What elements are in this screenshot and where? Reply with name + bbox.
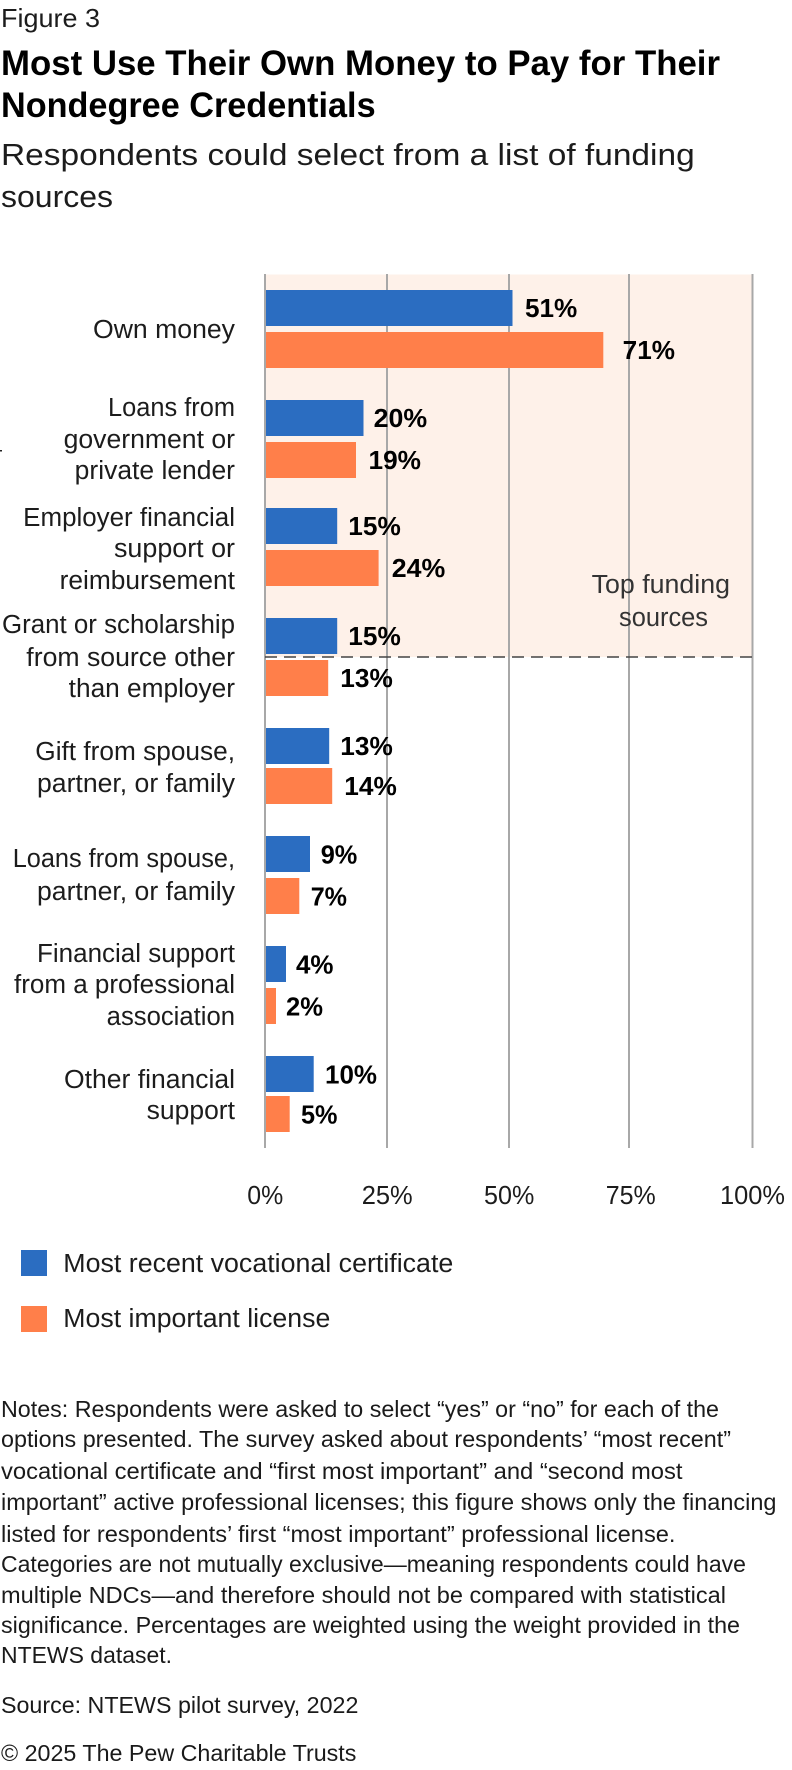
group: grant or scholarship: 13% — [340, 663, 393, 693]
group: gift from spouse, partner, or family — [35, 728, 397, 804]
title: Nondegree Credentials — [1, 86, 376, 125]
group: grant or scholarship — [2, 611, 401, 703]
x axis labels: 0% — [247, 1182, 283, 1210]
notes: NTEWS dataset. — [1, 1642, 172, 1668]
notes: significance. Percentages are weighted using the weight provided in the — [1, 1612, 740, 1638]
tiny edge mark — [0, 450, 2, 452]
group: grant or scholarship: 15% — [348, 621, 401, 651]
group: gift from spouse, partner, or family: Gift from spouse, — [35, 738, 235, 766]
group: loans from spouse, partner, or family — [13, 836, 357, 914]
group: other financial support: support — [147, 1097, 235, 1125]
notes: Notes: Respondents were asked to select “yes” or “no” for each of the — [1, 1396, 719, 1422]
subtitle: Respondents could select from a list of funding — [1, 137, 695, 172]
group: other financial support: Other financial — [64, 1066, 235, 1094]
group: employer financial support: support or — [114, 535, 236, 563]
group: loans from spouse, partner, or family: partner, or family — [37, 878, 235, 906]
subtitle: sources — [1, 179, 113, 214]
notes: important” active professional licenses; this figure shows only the financing — [1, 1489, 776, 1515]
panel: top funding sources highlight — [265, 274, 752, 657]
group: gift from spouse, partner, or family: 13% — [340, 731, 393, 761]
group: financial support from a professional association: from a professional — [14, 971, 235, 999]
group: grant or scholarship: from source other — [26, 644, 236, 672]
notes: vocational certificate and “first most important” and “second most — [1, 1458, 683, 1484]
group: own money: 71% — [623, 335, 675, 365]
group: gift from spouse, partner, or family: partner, or family — [37, 770, 235, 798]
copyright: © 2025 The Pew Charitable Trusts — [1, 1740, 356, 1766]
figure number: Figure 3 — [1, 3, 100, 33]
x axis labels — [247, 1182, 785, 1210]
group: loans from government or private lender: 20% — [374, 403, 427, 433]
group: gift from spouse, partner, or family: 14% — [344, 771, 397, 801]
group: financial support from a professional association — [14, 940, 334, 1031]
group: grant or scholarship: Grant or scholarship — [2, 611, 235, 639]
x axis labels: 50% — [484, 1182, 534, 1210]
title: Most Use Their Own Money to Pay for Their — [1, 44, 720, 83]
annotation: top funding sources — [592, 571, 730, 632]
group: own money: 51% — [525, 293, 577, 323]
notes — [1, 1396, 776, 1668]
x axis labels: 75% — [606, 1182, 656, 1210]
group: employer financial support: reimbursement — [60, 567, 235, 595]
group: financial support from a professional association: association — [107, 1003, 235, 1031]
annotation: top funding sources: sources — [619, 604, 708, 632]
bar chart — [2, 290, 675, 1132]
group: financial support from a professional association: 2% — [286, 992, 323, 1022]
group: loans from spouse, partner, or family: 9% — [321, 840, 357, 870]
notes: multiple NDCs—and therefore should not be compared with statistical — [1, 1582, 726, 1608]
notes: Categories are not mutually exclusive—meaning respondents could have — [1, 1551, 746, 1577]
notes: listed for respondents’ first “most important” professional license. — [1, 1521, 676, 1547]
group: own money — [93, 290, 675, 368]
subtitle — [1, 137, 695, 214]
group: employer financial support — [23, 504, 445, 595]
chart gridlines — [265, 274, 752, 1148]
group: other financial support: 5% — [301, 1100, 338, 1130]
annotation: top funding sources: Top funding — [592, 571, 730, 599]
group: financial support from a professional association: 4% — [296, 950, 334, 980]
legend — [21, 1250, 453, 1333]
group: employer financial support: Employer financial — [23, 504, 235, 532]
group: loans from government or private lender: private lender — [75, 457, 236, 485]
legend: most recent vocational certificate: Most recent vocational certificate — [63, 1250, 453, 1278]
group: loans from spouse, partner, or family: Loans from spouse, — [13, 845, 235, 873]
group: employer financial support: 15% — [348, 511, 401, 541]
group: loans from spouse, partner, or family: 7% — [311, 882, 347, 912]
group: own money: Own money — [93, 316, 235, 344]
x axis labels: 25% — [362, 1182, 413, 1210]
group: loans from government or private lender: 19% — [368, 445, 421, 475]
group: financial support from a professional association: Financial support — [37, 940, 235, 968]
group: employer financial support: 24% — [392, 553, 445, 583]
title — [1, 44, 720, 125]
group: loans from government or private lender: government or — [64, 426, 236, 454]
group: loans from government or private lender — [64, 394, 427, 485]
x axis labels: 100% — [720, 1182, 785, 1210]
group: loans from government or private lender: Loans from — [108, 394, 235, 422]
legend: most important license: Most important license — [63, 1305, 330, 1333]
group: other financial support: 10% — [325, 1060, 377, 1090]
source: Source: NTEWS pilot survey, 2022 — [1, 1692, 358, 1718]
dashed threshold line — [265, 656, 752, 658]
group: other financial support — [64, 1056, 377, 1132]
notes: options presented. The survey asked about respondents’ “most recent” — [1, 1426, 731, 1452]
group: grant or scholarship: than employer — [69, 675, 236, 703]
